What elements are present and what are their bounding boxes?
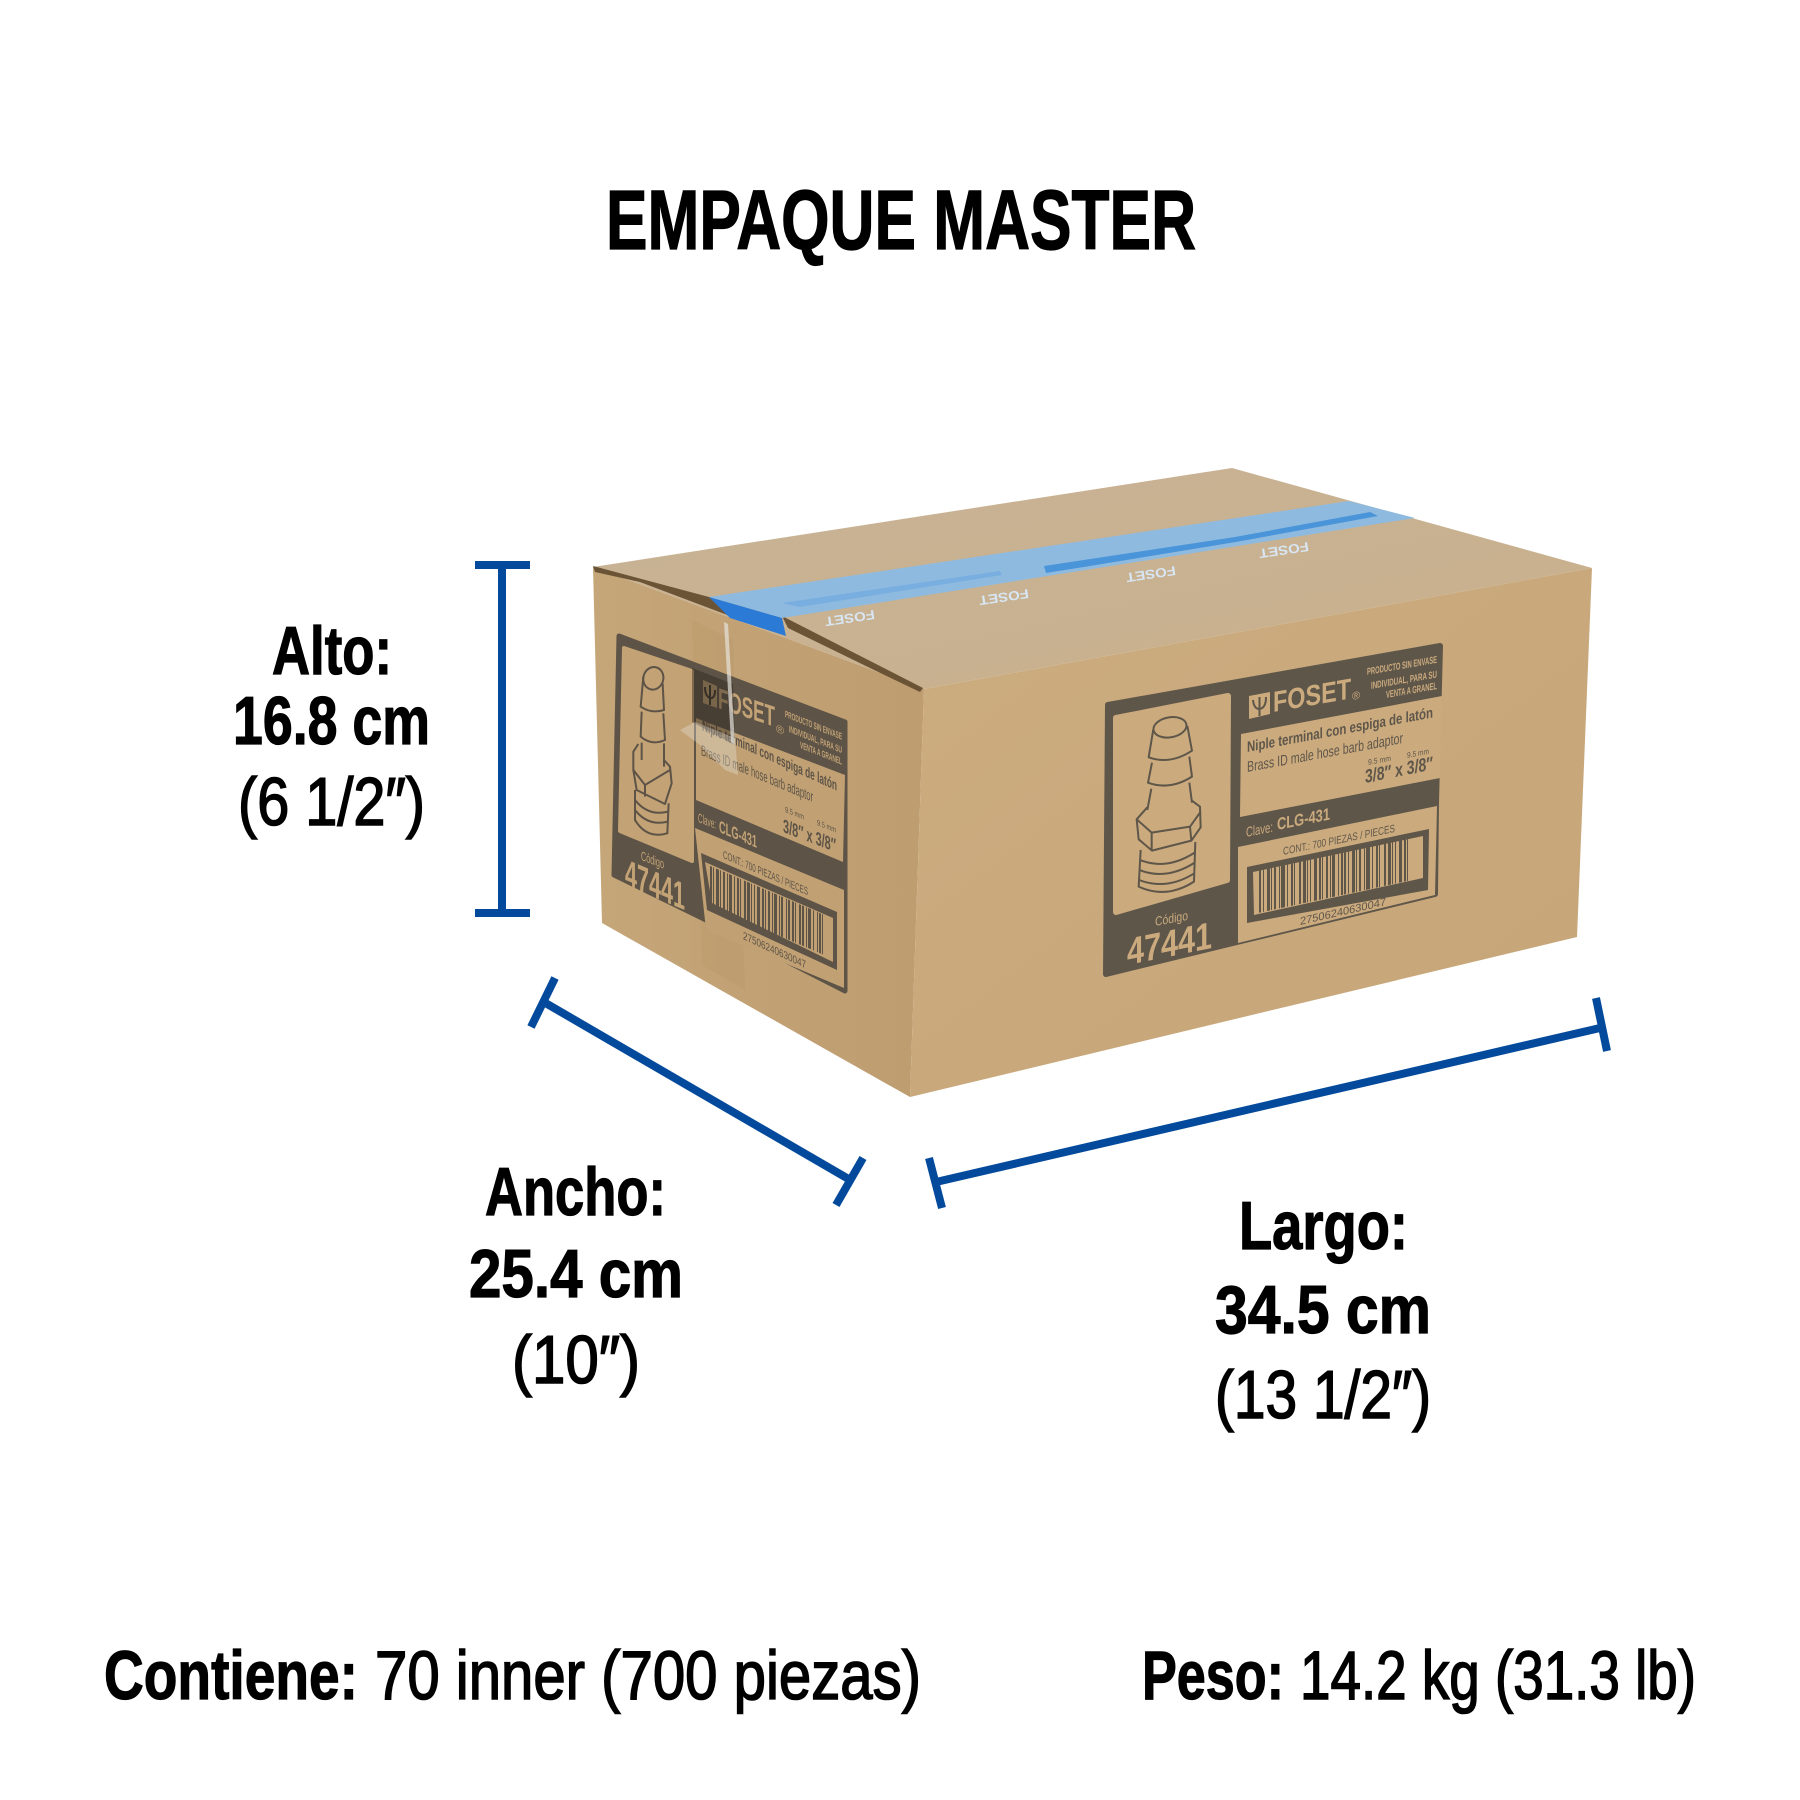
left code number: 47441 [625, 851, 685, 919]
product name: Niple terminal con espiga de latón [1247, 705, 1433, 756]
left bulk sale note: INDIVIDUAL, PARA SU [789, 724, 842, 756]
box top face [593, 468, 1592, 689]
open flap corrugated edge [593, 566, 730, 616]
code number: 47441 [1127, 914, 1212, 974]
contents line: CONT.: 700 PIEZAS / PIECES [1283, 823, 1395, 858]
left description panel [696, 718, 845, 862]
weight note: Peso: [1142, 1637, 1284, 1714]
seam band on left face [692, 620, 745, 990]
registered mark: ® [1352, 690, 1360, 703]
left sizes: 3/8″ x 3/8″ [783, 816, 836, 857]
left key code: Clave: [698, 810, 716, 832]
width label [469, 1154, 683, 1398]
title: EMPAQUE MASTER [606, 173, 1196, 267]
bulk sale note: VENTA A GRANEL [1386, 681, 1437, 701]
left registered mark: ® [776, 723, 785, 738]
barcode bars [1259, 860, 1409, 892]
clear tape strip [724, 622, 735, 745]
sizes: 3/8″ x 3/8″ [1365, 754, 1433, 788]
left picture panel [620, 648, 692, 861]
contents note: Contiene: [104, 1637, 358, 1714]
length label: (13 1/2″) [1215, 1357, 1431, 1433]
blue packing tape: FOSET [1258, 539, 1310, 561]
weight note: 14.2 kg (31.3 lb) [1300, 1637, 1696, 1714]
left contents line: CONT.: 700 PIEZAS / PIECES [723, 849, 808, 898]
dark tape shade over left label [692, 668, 735, 745]
left sizes: 9.5 mm [785, 804, 804, 822]
height label: Alto: [272, 613, 392, 689]
left product name: Niple terminal con espiga de latón [702, 718, 837, 795]
bulk sale note [1367, 655, 1437, 701]
label on left face [614, 636, 845, 991]
left code word: Código [641, 848, 664, 872]
left barcode white area [705, 862, 833, 962]
width dimension bracket [531, 978, 863, 1205]
blue packing tape: FOSET [978, 586, 1030, 608]
weight note [1142, 1637, 1696, 1714]
left barcode bars [710, 886, 823, 934]
picture panel [1116, 696, 1228, 912]
barcode frame [1247, 829, 1429, 923]
left sizes [783, 804, 836, 857]
blue packing tape: FOSET [1125, 563, 1177, 585]
lower panel [1238, 806, 1437, 943]
key code [1246, 803, 1330, 840]
label on right face [1106, 646, 1442, 974]
width label: Ancho: [485, 1154, 666, 1230]
sizes: 9.5 mm [1407, 747, 1429, 760]
blue packing tape [709, 501, 1415, 636]
contents note [104, 1637, 921, 1714]
key code: Clave: [1246, 819, 1273, 840]
flap edge right part [782, 616, 923, 692]
length label: 34.5 cm [1215, 1272, 1431, 1348]
code word: Código [1155, 908, 1188, 929]
key code: CLG-431 [1277, 803, 1330, 834]
description panel [1240, 696, 1442, 817]
length dimension bracket [929, 998, 1607, 1208]
nipple drawing [1137, 715, 1201, 892]
length label: Largo: [1239, 1188, 1408, 1264]
left bulk sale note: PRODUCTO SIN ENVASE [785, 709, 842, 743]
left key code: CLG-431 [719, 817, 757, 852]
label dark background [1106, 646, 1440, 974]
box left face [593, 567, 924, 1097]
contents note: 70 inner (700 piezas) [375, 1637, 921, 1714]
sizes: 9.5 mm [1368, 754, 1391, 767]
tape glare [680, 722, 738, 775]
height label: 16.8 cm [233, 683, 430, 759]
product name english: Brass ID male hose barb adaptor [1247, 730, 1403, 776]
left nipple drawing [633, 665, 672, 835]
width label: 25.4 cm [469, 1236, 683, 1312]
left brand name: FOSET [718, 683, 775, 734]
left key code [698, 810, 757, 852]
height label: (6 1/2″) [238, 764, 425, 840]
width label: (10″) [512, 1322, 640, 1398]
left logo mark [703, 680, 717, 708]
length label [1215, 1188, 1431, 1433]
left sizes: 9.5 mm [817, 817, 836, 835]
box right face [910, 568, 1592, 1097]
cardboard box [593, 468, 1592, 1097]
left label dark background [614, 636, 845, 991]
bulk sale note: PRODUCTO SIN ENVASE [1367, 655, 1437, 678]
bulk sale note: INDIVIDUAL, PARA SU [1371, 670, 1437, 692]
blue packing tape: FOSET [824, 607, 876, 629]
left bulk sale note: VENTA A GRANEL [800, 740, 842, 768]
left lower panel [695, 828, 844, 988]
left product name english: Brass ID male hose barb adaptor [701, 743, 813, 806]
barcode number: 27506240630047 [1300, 896, 1386, 928]
brand name: FOSET [1273, 674, 1351, 719]
left bulk sale note [785, 709, 842, 768]
left barcode number: 27506240630047 [743, 930, 806, 971]
height dimension bracket [475, 565, 530, 913]
barcode white area [1253, 836, 1423, 915]
left barcode frame [701, 853, 837, 970]
logo mark [1249, 692, 1270, 719]
height label [233, 613, 430, 840]
